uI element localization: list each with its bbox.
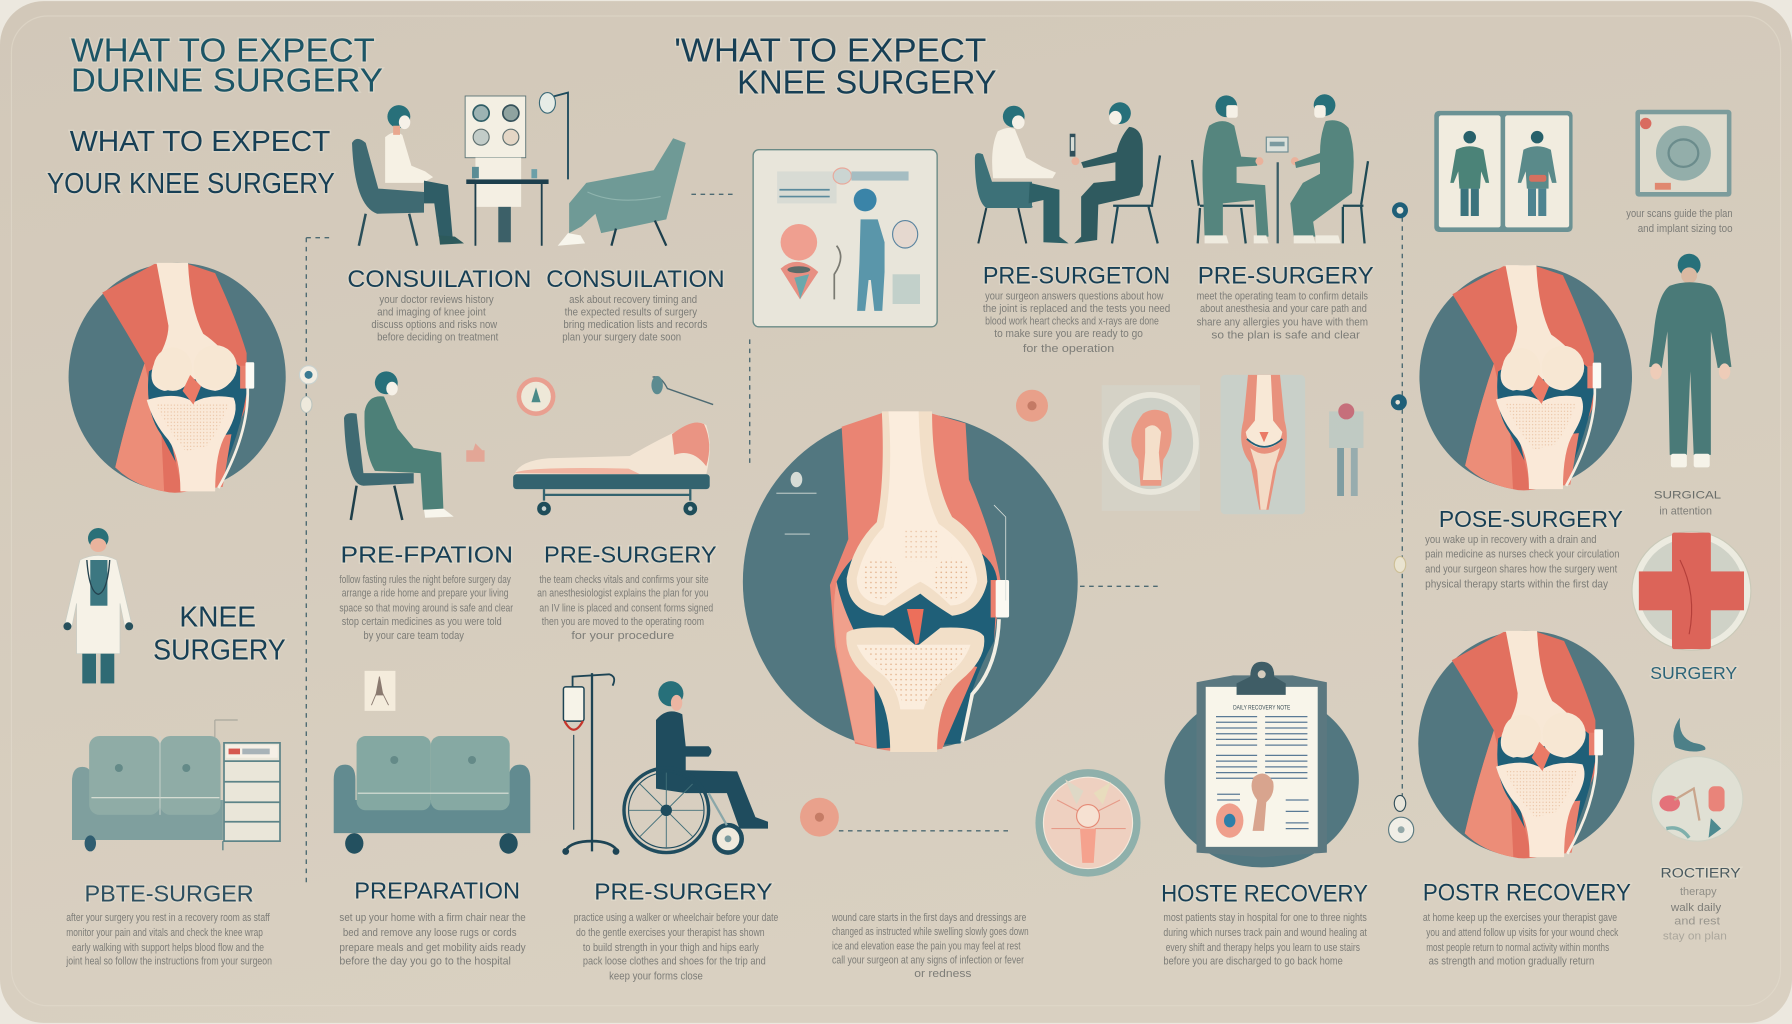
icon: badge bbox=[517, 377, 555, 416]
label: knee surgery: SURGERY bbox=[153, 634, 286, 666]
text: recovery caption: and rest bbox=[1674, 916, 1720, 928]
illustration: left knee anatomy bbox=[69, 263, 286, 493]
text: consultation details: plan your surgery date soon bbox=[562, 332, 681, 344]
text: consultation details: your doctor reviews history bbox=[379, 294, 494, 306]
title: top left: DURINE SURGERY bbox=[71, 62, 383, 99]
text: hospital recovery: every shift and therapy helps you learn to use stairs bbox=[1166, 942, 1360, 954]
text: recovery caption bbox=[1663, 886, 1727, 942]
text: consultation details: and imaging of knee joint bbox=[377, 306, 486, 318]
text: preparation details: an anesthesiologist explains the plan for you bbox=[537, 588, 709, 600]
icon: small salmon node bbox=[800, 798, 839, 837]
text: post surgery: after your surgery you rest in a recovery room as staff bbox=[66, 912, 270, 924]
text: hospital recovery: before you are discharged to go back home bbox=[1163, 956, 1343, 968]
illustration: consultation patient with lab coat bbox=[352, 105, 464, 246]
title: top centre: 'WHAT TO EXPECT bbox=[674, 33, 986, 70]
text: post recovery: most people return to normal activity within months bbox=[1426, 942, 1610, 954]
text: hospital recovery bbox=[1163, 912, 1367, 968]
text: preparation details: space so that moving around is safe and clear bbox=[339, 602, 513, 614]
text: preparation details: arrange a ride home and prepare your living bbox=[342, 588, 509, 600]
icon: small salmon dot bbox=[1016, 390, 1048, 422]
text: post recovery: you and attend follow up visits for your wound check bbox=[1426, 927, 1619, 939]
illustration: two-panel figures frame bbox=[1434, 111, 1573, 232]
text: post surgery right: pain medicine as nurses check your circulation bbox=[1425, 549, 1619, 561]
text: preparation: set up your home with a firm chair near the bbox=[339, 912, 526, 924]
text: pre-surgery top: about anesthesia and your care path and bbox=[1200, 303, 1367, 315]
icon: small scanner bbox=[1329, 403, 1363, 496]
text: pre surgery: to build strength in your thigh and hips early bbox=[583, 942, 759, 954]
text: preparation details: follow fasting rules the night before surgery day bbox=[339, 574, 511, 586]
text: preparation details: for your procedure bbox=[571, 630, 674, 642]
text: preparation details: the team checks vitals and confirms your site bbox=[539, 574, 709, 586]
illustration: covered armchair bbox=[558, 138, 686, 246]
illustration: IV stand bbox=[562, 673, 619, 855]
illustration: patient standing in scrubs bbox=[1649, 254, 1731, 467]
title: top centre: KNEE SURGERY bbox=[737, 65, 997, 102]
icon: recovery bubble bbox=[1651, 718, 1743, 841]
text: pre-surgery top: so the plan is safe and clear bbox=[1211, 329, 1360, 341]
text: centre bottom: changed as instructed while swelling slowly goes down bbox=[832, 926, 1029, 938]
text: preparation details bbox=[339, 574, 713, 642]
text: recovery caption: stay on plan bbox=[1663, 930, 1727, 942]
text: preparation bbox=[339, 912, 526, 968]
text: scrubs caption: in attention bbox=[1659, 505, 1712, 517]
text: pre-surgery top: your surgeon answers questions about how bbox=[985, 290, 1164, 302]
text: hospital recovery: during which nurses track pain and wound healing at bbox=[1163, 927, 1367, 939]
heading: post surgery right: POSE-SURGERY bbox=[1439, 506, 1623, 532]
heading: consultation: CONSUILATION bbox=[347, 266, 531, 293]
subtitle: YOUR KNEE SURGERY bbox=[47, 168, 335, 200]
icon: red cross bbox=[1632, 531, 1751, 650]
text: consultation details: the expected results of surgery bbox=[565, 306, 698, 318]
title: top left: WHAT TO EXPECT bbox=[71, 33, 375, 70]
label: knee surgery: KNEE bbox=[179, 601, 256, 633]
text: post surgery right: and your surgeon shares how the surgery went bbox=[1425, 564, 1617, 576]
illustration: patient in wheelchair bbox=[624, 681, 768, 853]
illustration: right knee anatomy bottom bbox=[1418, 631, 1634, 858]
illustration: seated patient bbox=[344, 371, 454, 520]
text: post surgery bbox=[65, 912, 272, 968]
text: centre bottom: call your surgeon at any signs of infection or fever bbox=[832, 954, 1024, 966]
illustration: sofa bbox=[334, 671, 530, 854]
text: post surgery: joint heal so follow the instructions from your surgeon bbox=[65, 956, 272, 968]
heading: pre-surgery top: PRE-SURGERY bbox=[1198, 262, 1374, 289]
heading: bottom left column: PBTE-SURGER bbox=[85, 881, 254, 907]
heading: preparation: PRE-SURGERY bbox=[544, 541, 717, 567]
heading: recovery: POSTR RECOVERY bbox=[1423, 880, 1631, 907]
illustration: x-ray board and table bbox=[465, 93, 568, 246]
text: pre-surgery top: the joint is replaced and the tests you need bbox=[983, 303, 1170, 315]
label: knee surgery bbox=[153, 601, 286, 666]
illustration: medical chart board bbox=[753, 150, 937, 327]
text: pre surgery: do the gentle exercises your therapist has shown bbox=[576, 927, 765, 939]
text: pre-surgery top: meet the operating team to confirm details bbox=[1197, 290, 1368, 302]
heading: bottom left column: PREPARATION bbox=[354, 877, 520, 903]
text: centre bottom: or redness bbox=[914, 968, 972, 980]
text: recovery caption: therapy bbox=[1680, 886, 1717, 898]
text: post recovery bbox=[1423, 912, 1619, 968]
text: preparation: before the day you go to the hospital bbox=[339, 956, 511, 968]
text: scan caption bbox=[1626, 208, 1733, 235]
text: consultation details bbox=[371, 294, 708, 344]
illustration: doctor bbox=[63, 528, 133, 683]
text: post surgery right: physical therapy starts within the first day bbox=[1425, 578, 1609, 590]
panel: knee in ring bbox=[1102, 385, 1200, 511]
text: preparation details: stop certain medicines as you were told bbox=[342, 616, 502, 628]
text: pre surgery: keep your forms close bbox=[609, 970, 703, 982]
text: pre surgery bbox=[574, 912, 778, 982]
illustration: two surgeons bbox=[1192, 94, 1368, 243]
subtitle bbox=[47, 126, 335, 200]
heading: recovery bbox=[1161, 880, 1631, 908]
heading: consultation bbox=[347, 266, 725, 293]
text: post surgery: monitor your pain and vitals and check the knee wrap bbox=[66, 927, 263, 939]
text: pre surgery: practice using a walker or wheelchair before your date bbox=[574, 912, 778, 924]
illustration: clipboard over circle bbox=[1165, 662, 1359, 867]
text: scrubs caption: SURGICAL bbox=[1654, 489, 1721, 501]
icon: knee target bubble bbox=[1035, 769, 1141, 877]
text: post surgery: early walking with support helps blood flow and the bbox=[72, 942, 264, 954]
text: preparation details: then you are moved to the operating room bbox=[542, 616, 704, 628]
illustration: central knee anatomy bbox=[743, 411, 1078, 752]
text: preparation details: by your care team today bbox=[363, 630, 464, 642]
illustration: clipboard over circle: DAILY RECOVERY NOTE bbox=[1233, 705, 1291, 712]
icon: small supply box bbox=[466, 443, 485, 462]
text: pre-surgery top: for the operation bbox=[1023, 343, 1114, 355]
heading: bottom left column bbox=[85, 877, 773, 907]
label: surgery small: SURGERY bbox=[1650, 663, 1738, 683]
heading: consultation: CONSUILATION bbox=[546, 266, 725, 293]
text: hospital recovery: most patients stay in hospital for one to three nights bbox=[1163, 912, 1367, 924]
text: pre-surgery top: blood work heart checks and x-rays are done bbox=[985, 316, 1159, 328]
text: consultation details: discuss options and risks now bbox=[371, 319, 497, 331]
heading: preparation bbox=[341, 541, 717, 567]
illustration: sofa and drawers bbox=[72, 720, 280, 851]
illustration: right knee anatomy top bbox=[1419, 265, 1632, 490]
heading: bottom left column: PRE-SURGERY bbox=[594, 878, 773, 904]
text: scrubs caption bbox=[1654, 489, 1721, 517]
illustration: doctor and patient seated bbox=[975, 102, 1160, 243]
illustration: scan image bbox=[1635, 110, 1731, 197]
heading: pre-surgery top: PRE-SURGETON bbox=[983, 262, 1170, 289]
text: preparation: prepare meals and get mobility aids ready bbox=[339, 942, 526, 954]
heading: pre-surgery top bbox=[983, 262, 1374, 289]
panel: knee diagram bbox=[1221, 375, 1305, 514]
text: consultation details: before deciding on treatment bbox=[377, 332, 498, 344]
text: centre bottom: wound care starts in the first days and dressings are bbox=[831, 912, 1026, 924]
text: centre bottom: ice and elevation ease the pain you may feel at rest bbox=[832, 941, 1021, 953]
connector dots bbox=[299, 202, 1414, 842]
text: preparation details: an IV line is placed and consent forms signed bbox=[539, 602, 713, 614]
text: post surgery right: you wake up in recovery with a drain and bbox=[1425, 534, 1597, 546]
text: recovery caption: walk daily bbox=[1670, 902, 1722, 914]
text: pre surgery: pack loose clothes and shoes for the trip and bbox=[583, 956, 766, 968]
text: scan caption: your scans guide the plan bbox=[1626, 208, 1733, 220]
illustration: hospital bed bbox=[513, 376, 713, 515]
heading: recovery: HOSTE RECOVERY bbox=[1161, 881, 1368, 908]
title: top left bbox=[71, 33, 383, 99]
text: pre-surgery top: to make sure you are ready to go bbox=[994, 328, 1143, 340]
text: consultation details: bring medication lists and records bbox=[563, 319, 708, 331]
text: post surgery right bbox=[1425, 534, 1619, 590]
text: post recovery: at home keep up the exercises your therapist gave bbox=[1423, 912, 1617, 924]
title: top centre bbox=[674, 33, 997, 102]
dashed connectors bbox=[306, 194, 1402, 886]
label: recovery small: ROCTIERY bbox=[1661, 866, 1741, 881]
text: post recovery: as strength and motion gradually return bbox=[1429, 956, 1594, 968]
text: consultation details: ask about recovery timing and bbox=[569, 294, 697, 306]
text: pre-surgery top: share any allergies you have with them bbox=[1197, 317, 1368, 329]
text: preparation: bed and remove any loose rugs or cords bbox=[343, 927, 517, 939]
subtitle: WHAT TO EXPECT bbox=[70, 126, 330, 158]
text: pre-surgery top bbox=[983, 290, 1368, 355]
heading: preparation: PRE-FPATION bbox=[341, 541, 513, 567]
text: scan caption: and implant sizing too bbox=[1638, 223, 1733, 235]
text: centre bottom bbox=[831, 912, 1029, 980]
chart lines bbox=[1216, 717, 1309, 829]
